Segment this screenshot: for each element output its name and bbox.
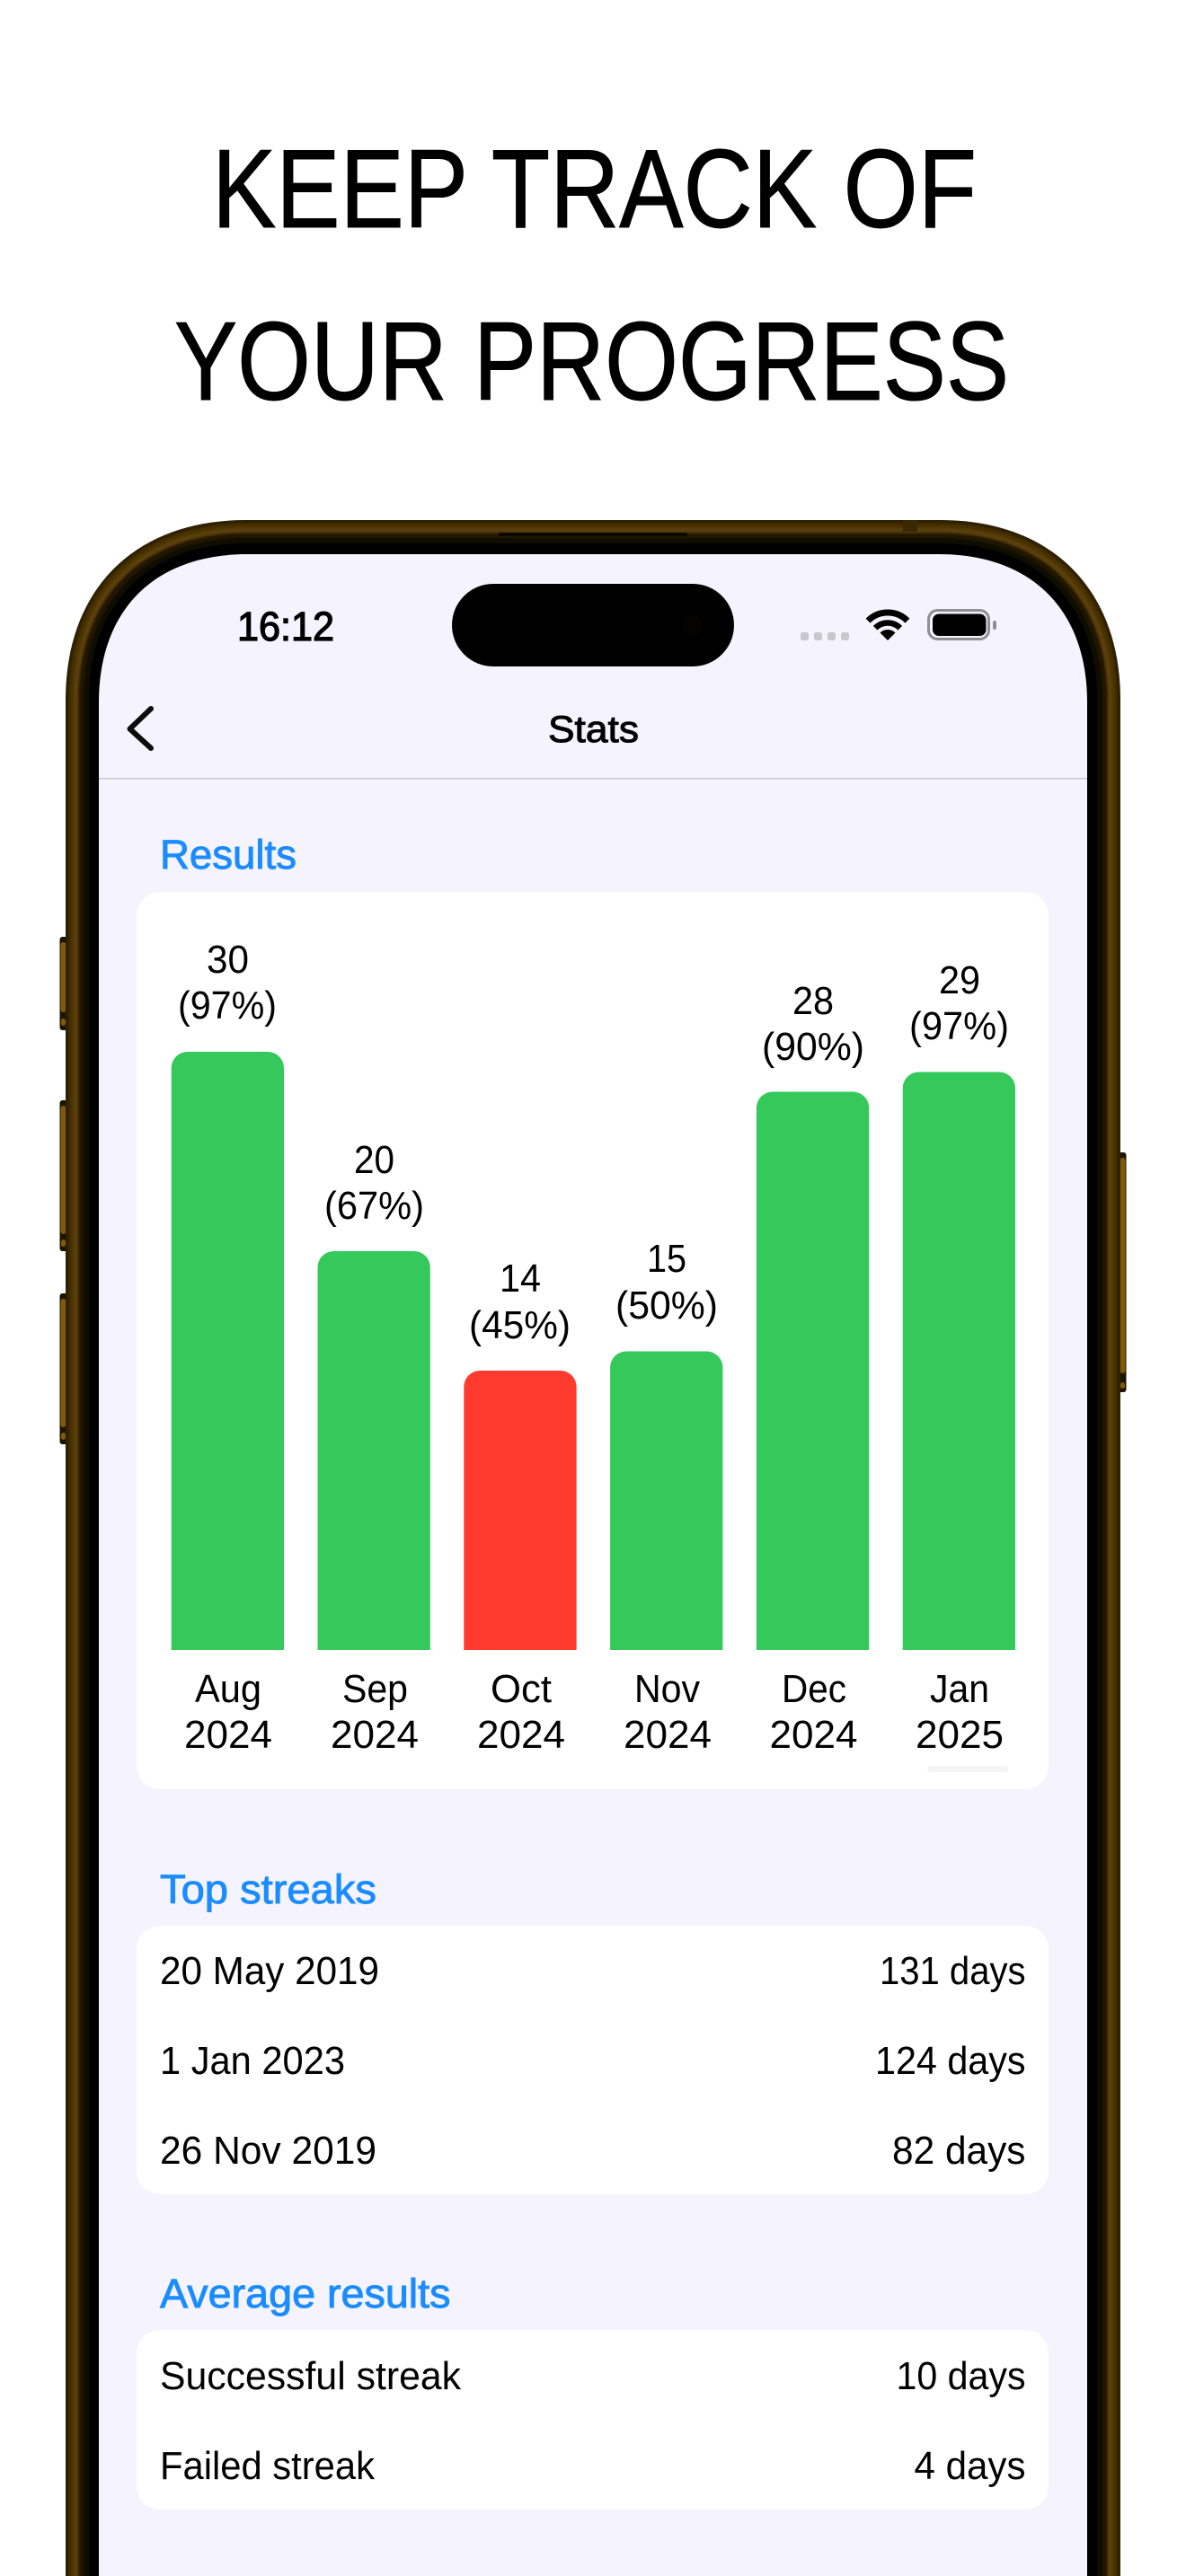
row: 1 Jan 2023: 124 days <box>875 2039 1026 2083</box>
panel: top streaks <box>137 1926 1049 2194</box>
bar: Jan 2025: 2025 <box>916 1713 1004 1757</box>
scroll indicator <box>927 1766 1008 1772</box>
row: failed streak: Failed streak <box>160 2444 376 2488</box>
bar: Nov 2024: (50%) <box>615 1284 718 1328</box>
panel: results bar chart <box>137 892 1049 1789</box>
dynamic island <box>452 584 734 666</box>
bar: Jan 2025 <box>903 958 1015 1757</box>
bar: Oct 2024: 14 <box>500 1257 541 1301</box>
heading: results: Results <box>160 832 296 878</box>
bar: Aug 2024: 2024 <box>184 1713 272 1757</box>
row: failed streak: 4 days <box>915 2444 1026 2488</box>
bar: Dec 2024 <box>757 979 869 1757</box>
row: successful streak: Successful streak <box>160 2354 462 2398</box>
icon: cellular signal dots <box>801 632 849 640</box>
title: YOUR PROGRESS <box>174 300 1009 424</box>
row: 26 Nov 2019 <box>160 2129 1026 2173</box>
icon: wifi <box>868 613 907 640</box>
bar: Aug 2024: 30 <box>207 938 249 982</box>
bar: Dec 2024: 2024 <box>769 1713 857 1757</box>
icon: back chevron <box>129 709 151 748</box>
bar: Oct 2024: 2024 <box>477 1713 565 1757</box>
icon: battery <box>929 611 996 640</box>
bar: Aug 2024: Aug <box>195 1667 261 1711</box>
bar: Nov 2024: 15 <box>647 1237 686 1281</box>
status bar time: 16:12 <box>237 604 334 649</box>
bar: Oct 2024: (45%) <box>469 1303 571 1347</box>
bar: Sep 2024: 2024 <box>331 1713 419 1757</box>
heading: top streaks: Top streaks <box>160 1866 376 1912</box>
bar: Oct 2024: Oct <box>491 1667 552 1711</box>
bar: Dec 2024: (90%) <box>762 1025 864 1069</box>
bar: Oct 2024 <box>464 1257 577 1757</box>
title <box>174 128 1009 424</box>
row: successful streak <box>160 2354 1026 2398</box>
row: 26 Nov 2019: 82 days <box>892 2129 1026 2173</box>
row: failed streak <box>160 2444 1026 2488</box>
row: 1 Jan 2023 <box>160 2039 1026 2083</box>
heading: average results: Average results <box>160 2271 451 2316</box>
row: 26 Nov 2019: 26 Nov 2019 <box>160 2129 376 2173</box>
row: 1 Jan 2023: 1 Jan 2023 <box>160 2039 345 2083</box>
bar: Sep 2024: (67%) <box>324 1184 424 1228</box>
row: 20 May 2019 <box>160 1949 1026 1993</box>
bar: Dec 2024: 28 <box>792 979 834 1023</box>
bar: Sep 2024: Sep <box>342 1667 408 1711</box>
bar: Aug 2024 <box>172 938 284 1757</box>
navigation title: Stats <box>548 708 639 750</box>
bar: Nov 2024: Nov <box>634 1667 700 1711</box>
bar: Nov 2024 <box>610 1237 722 1757</box>
bar: Sep 2024: 20 <box>354 1138 394 1182</box>
bar: Aug 2024: (97%) <box>178 984 277 1028</box>
title: KEEP TRACK OF <box>212 128 977 251</box>
row: 20 May 2019: 131 days <box>880 1949 1026 1993</box>
bar: Jan 2025: (97%) <box>909 1004 1009 1048</box>
bar: Nov 2024: 2024 <box>624 1713 712 1757</box>
side buttons <box>59 937 1127 1444</box>
bar: Jan 2025: 29 <box>939 958 980 1002</box>
bar: Dec 2024: Dec <box>782 1667 846 1711</box>
bar: Jan 2025: Jan <box>930 1667 989 1711</box>
bar: Sep 2024 <box>318 1138 430 1757</box>
row: 20 May 2019: 20 May 2019 <box>160 1949 379 1993</box>
panel: average results <box>137 2330 1049 2510</box>
screen background <box>99 554 1087 2576</box>
row: successful streak: 10 days <box>897 2354 1026 2398</box>
phone mockup <box>59 520 1127 2576</box>
phone frame <box>66 520 1120 2576</box>
